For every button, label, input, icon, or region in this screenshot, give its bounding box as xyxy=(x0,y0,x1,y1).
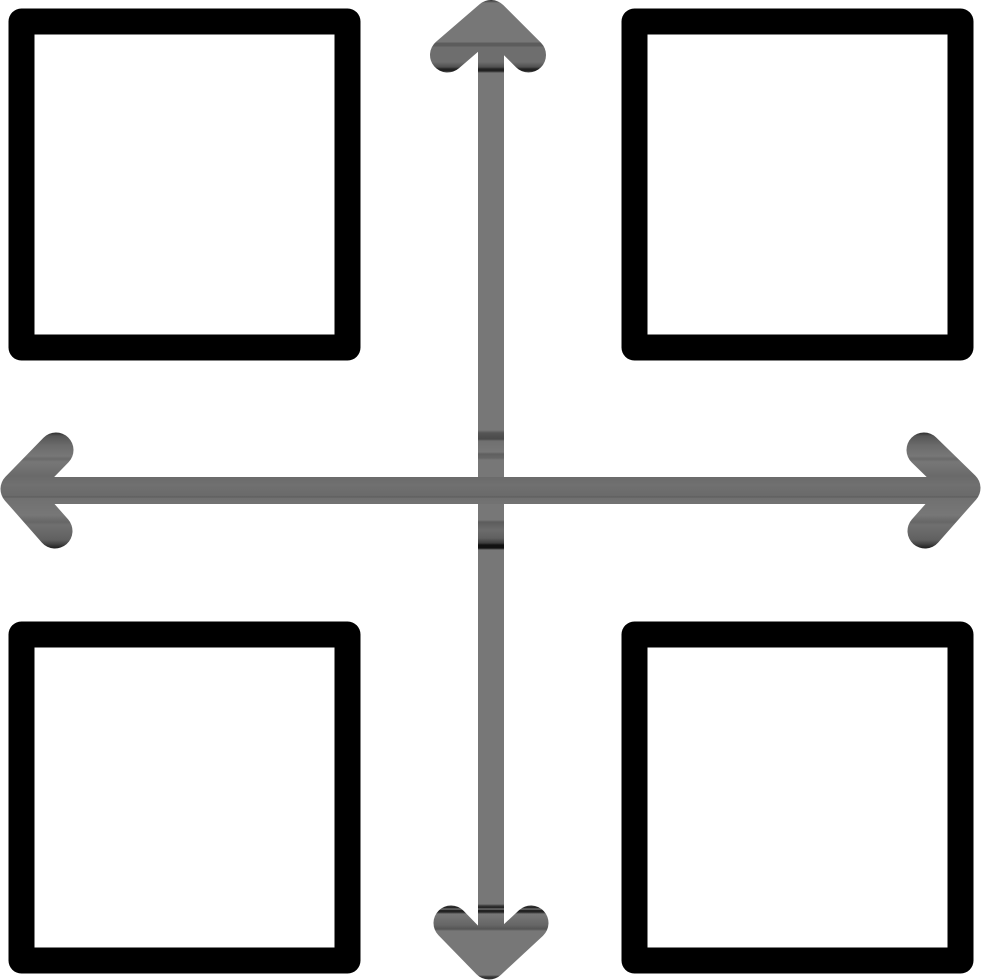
square: bottom right xyxy=(634,634,960,960)
arrow: horizontal double-headed xyxy=(18,450,963,531)
square: top right xyxy=(634,22,960,348)
arrow: vertical double-headed xyxy=(448,18,531,962)
square: bottom left xyxy=(22,634,348,960)
square: top left xyxy=(22,22,348,348)
